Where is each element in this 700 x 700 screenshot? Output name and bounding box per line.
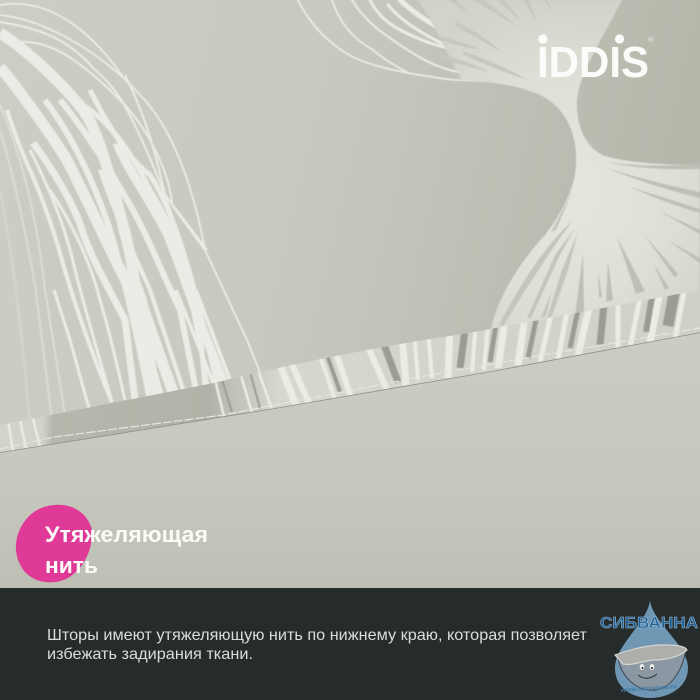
- pink circle accent: [16, 505, 92, 582]
- watermark logo: Sibvanna drop with bathtub: [600, 600, 698, 698]
- footer description text: [47, 627, 588, 663]
- logo: bathtub body: [618, 650, 686, 690]
- logo: name: СИБВАННА: [600, 615, 698, 632]
- heading: weighted thread: Утяжеляющая: [45, 522, 208, 547]
- top arcing strands: [298, 0, 530, 82]
- logo: bathtub face: [638, 664, 657, 678]
- rope: bottom shadow edge: [0, 333, 700, 453]
- footer description text: Шторы имеют утяжеляющую нить по нижнему краю, которая позволяет: [47, 627, 588, 644]
- logo: url: www.sibvanna.ru: [620, 684, 677, 694]
- rope: darker shadow stripes: [222, 288, 675, 412]
- rope: stitching line: [0, 328, 700, 449]
- logo: water drop: [615, 600, 688, 698]
- footer description text: избежать задирания ткани.: [47, 646, 253, 663]
- rope: light thread stripes: [8, 286, 685, 458]
- hem rope with weighted thread: [0, 285, 700, 458]
- right bright fan of threads: [418, 0, 700, 335]
- logo: bathtub rim: [615, 645, 687, 665]
- heading: weighted thread: [45, 522, 208, 578]
- heading: weighted thread: нить: [45, 553, 98, 578]
- brand logo: iddis: ®: [648, 36, 654, 44]
- footer bar: [0, 588, 700, 700]
- left strand pattern: [0, 4, 265, 425]
- brand logo: iddis: IDDIS: [537, 38, 649, 87]
